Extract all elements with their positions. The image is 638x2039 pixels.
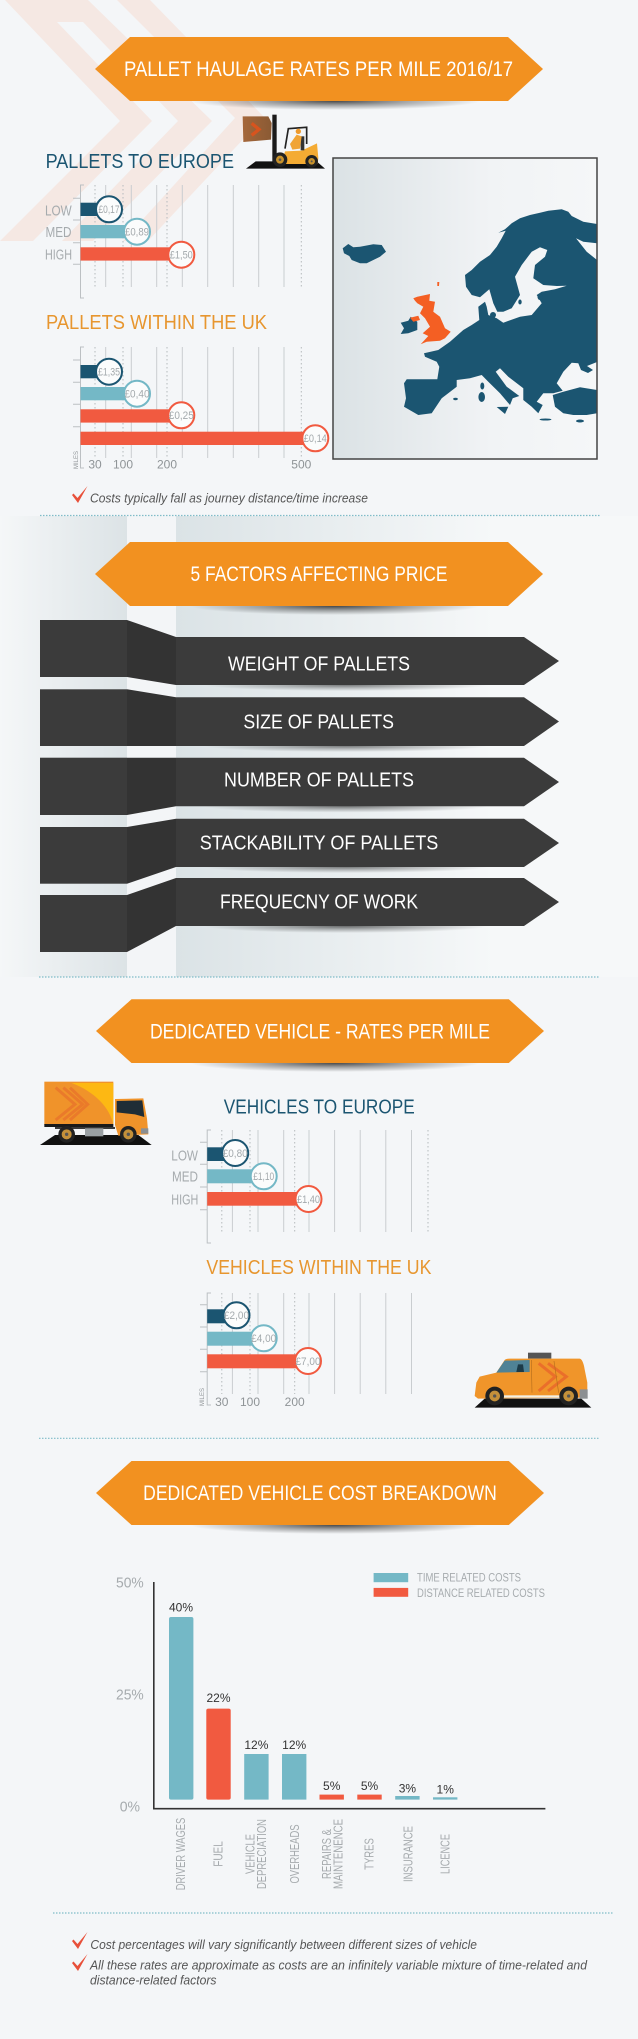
bar: driver wages 40% <box>169 1600 193 1890</box>
bar: repairs and maintenence 5% <box>319 1779 346 1889</box>
bar: high £1,50: HIGH <box>45 246 72 263</box>
bar: high £1,40: £1,40 <box>297 1194 320 1206</box>
section 2: five factors <box>0 516 638 977</box>
axis: miles: 100 <box>240 1395 260 1409</box>
ribbon: size of pallets <box>40 689 559 752</box>
chart: pallets within the uk <box>73 347 328 471</box>
legend: DISTANCE RELATED COSTS <box>417 1588 545 1600</box>
mediterranean and baltic islands <box>453 294 584 422</box>
bar: vehicle depreciation 12% <box>242 1738 269 1889</box>
turkey <box>553 387 597 415</box>
bar: overheads 12% <box>282 1738 307 1884</box>
bar: £1,35: £1,35 <box>98 367 120 379</box>
icon: truck <box>40 1082 152 1145</box>
ribbon: weight of pallets <box>40 620 559 691</box>
ribbon: number of pallets: NUMBER OF PALLETS <box>224 770 414 792</box>
axis: miles <box>74 451 312 471</box>
bar: repairs and maintenence 5%: REPAIRS & <box>319 1829 334 1879</box>
bar: repairs and maintenence 5%: MAINTENENCE <box>331 1819 346 1889</box>
section 4: cost breakdown <box>96 1461 545 1890</box>
ribbon: frequency of work <box>40 878 559 952</box>
bar: med £0,89 <box>46 219 150 245</box>
bar: fuel 22% <box>206 1691 231 1867</box>
bar: £1,35 <box>80 359 122 385</box>
note: cost percentages <box>72 1932 477 1952</box>
bar: high £1,50 <box>45 242 194 268</box>
chart: pallets to europe <box>45 185 301 298</box>
axis: miles: MILES <box>200 1388 206 1406</box>
bar: vehicle depreciation 12%: DEPRECIATION <box>254 1819 269 1889</box>
united kingdom <box>410 282 451 344</box>
bar: low £0,80: LOW <box>171 1147 199 1164</box>
axis: miles: 30 <box>88 457 102 471</box>
bar: high £1,50: £1,50 <box>170 250 193 262</box>
bar: £0,40: £0,40 <box>124 389 150 401</box>
bar: fuel 22%: 22% <box>206 1691 231 1705</box>
bar: med £0,89: £0,89 <box>125 227 149 239</box>
map: europe with uk highlighted <box>333 158 597 459</box>
bar: £2,00: £2,00 <box>224 1310 249 1322</box>
bar: licence 1%: LICENCE <box>438 1834 453 1874</box>
bar: insurance 3% <box>395 1782 420 1882</box>
heading: pallets to europe: PALLETS TO EUROPE <box>46 151 234 173</box>
legend <box>374 1573 545 1600</box>
axis: miles: 200 <box>285 1395 305 1409</box>
bar: tyres 5% <box>357 1779 382 1870</box>
iceland <box>343 244 386 263</box>
bar: £0,14 <box>80 425 328 451</box>
chart: vehicles to europe <box>171 1130 428 1243</box>
banner: 5 factors <box>95 542 543 615</box>
banner: dedicated vehicle rates <box>96 999 544 1072</box>
mainland europe <box>404 209 597 415</box>
bar: med £0,89: MED <box>46 224 72 241</box>
section 3: dedicated vehicle rates <box>40 999 591 1409</box>
bar: low £0,80: £0,80 <box>223 1148 248 1160</box>
bar: £2,00 <box>207 1302 250 1328</box>
bar: high £1,40 <box>171 1186 322 1212</box>
bar: £4,00: £4,00 <box>251 1333 276 1345</box>
banner: cost breakdown <box>96 1461 544 1534</box>
bar: £0,25: £0,25 <box>169 410 194 422</box>
bar: low £0,17 <box>45 196 122 222</box>
bar: high £1,40: HIGH <box>171 1191 198 1208</box>
watermark chevrons <box>0 0 264 241</box>
banner: dedicated vehicle rates: DEDICATED VEHICLE - RATES PER MILE <box>150 1020 490 1043</box>
bar: tyres 5%: 5% <box>361 1779 379 1793</box>
banner: 5 factors: 5 FACTORS AFFECTING PRICE <box>190 563 448 586</box>
bar: £0,25 <box>80 402 194 428</box>
bar: tyres 5%: TYRES <box>362 1838 376 1870</box>
bar: fuel 22%: FUEL <box>210 1841 226 1867</box>
bar: overheads 12%: 12% <box>282 1738 307 1752</box>
heading: pallets within the uk: PALLETS WITHIN THE UK <box>46 312 268 334</box>
bar: insurance 3%: 3% <box>399 1782 416 1796</box>
heading: vehicles to europe: VEHICLES TO EUROPE <box>224 1096 415 1118</box>
bar: £7,00: £7,00 <box>296 1356 320 1368</box>
bar: repairs and maintenence 5%: 5% <box>323 1779 341 1793</box>
note: costs typically fall <box>72 486 368 506</box>
note: approximate rates: All these rates are approximate as costs are an infinitely variable mixture of time-related and <box>89 1958 588 1972</box>
bar: low £0,17: £0,17 <box>98 204 120 216</box>
section 1: pallet haulage rates <box>45 37 597 506</box>
ribbon: stackability of pallets <box>40 819 559 884</box>
bar: £0,40 <box>80 381 150 407</box>
axis: miles: 500 <box>291 457 312 471</box>
bar: med £1,10: £1,10 <box>253 1171 274 1183</box>
y axis labels <box>116 1574 144 1815</box>
banner: cost breakdown: DEDICATED VEHICLE COST BREAKDOWN <box>143 1482 497 1505</box>
note: costs typically fall: Costs typically fall as journey distance/time increase <box>90 492 368 506</box>
ribbon: size of pallets: SIZE OF PALLETS <box>243 712 394 734</box>
axis: miles: MILES <box>74 451 80 469</box>
bar: med £1,10 <box>172 1163 277 1189</box>
banner: pallet haulage rates <box>95 37 543 110</box>
bar: vehicle depreciation 12%: 12% <box>244 1738 269 1752</box>
ireland <box>401 317 417 334</box>
banner: pallet haulage rates: PALLET HAULAGE RATES PER MILE 2016/17 <box>124 58 513 81</box>
notes <box>72 1932 588 1987</box>
bar: £7,00 <box>207 1348 321 1374</box>
icon: forklift <box>243 115 325 169</box>
ribbon: weight of pallets: WEIGHT OF PALLETS <box>228 653 410 675</box>
note: cost percentages: Cost percentages will vary significantly between different sizes of vehicle <box>90 1938 477 1952</box>
y axis labels: 0% <box>120 1798 140 1815</box>
section background <box>0 516 638 977</box>
bar chart: cost breakdown <box>116 1573 545 1890</box>
bar: £0,14: £0,14 <box>304 433 327 445</box>
ribbon: number of pallets <box>40 758 559 815</box>
bar: licence 1%: 1% <box>437 1783 454 1797</box>
axis: miles: 100 <box>113 457 133 471</box>
bar: med £1,10: MED <box>172 1169 198 1186</box>
bar: low £0,17: LOW <box>45 202 72 219</box>
legend: TIME RELATED COSTS <box>417 1573 521 1585</box>
y axis labels: 25% <box>116 1686 144 1703</box>
axis: miles: 200 <box>157 457 177 471</box>
bar: licence 1% <box>433 1783 457 1874</box>
bar: driver wages 40%: 40% <box>169 1600 193 1614</box>
bar: insurance 3%: INSURANCE <box>401 1826 416 1882</box>
bar: overheads 12%: OVERHEADS <box>287 1824 302 1884</box>
icon: van <box>475 1353 591 1408</box>
bar: £4,00 <box>207 1325 277 1351</box>
heading: vehicles within the uk: VEHICLES WITHIN THE UK <box>206 1257 432 1279</box>
ribbon: stackability of pallets: STACKABILITY OF PALLETS <box>200 832 438 854</box>
note: approximate rates <box>72 1954 588 1987</box>
axis: miles <box>200 1388 305 1409</box>
axis: miles: 30 <box>215 1395 229 1409</box>
y axis labels: 50% <box>116 1574 144 1591</box>
bar: vehicle depreciation 12%: VEHICLE <box>242 1834 257 1874</box>
bar: low £0,80 <box>171 1140 248 1166</box>
chart: vehicles within the uk <box>200 1293 412 1409</box>
note: approximate rates: distance-related factors <box>90 1973 216 1987</box>
ribbon: frequency of work: FREQUECNY OF WORK <box>220 891 419 913</box>
bar: driver wages 40%: DRIVER WAGES <box>173 1817 188 1890</box>
